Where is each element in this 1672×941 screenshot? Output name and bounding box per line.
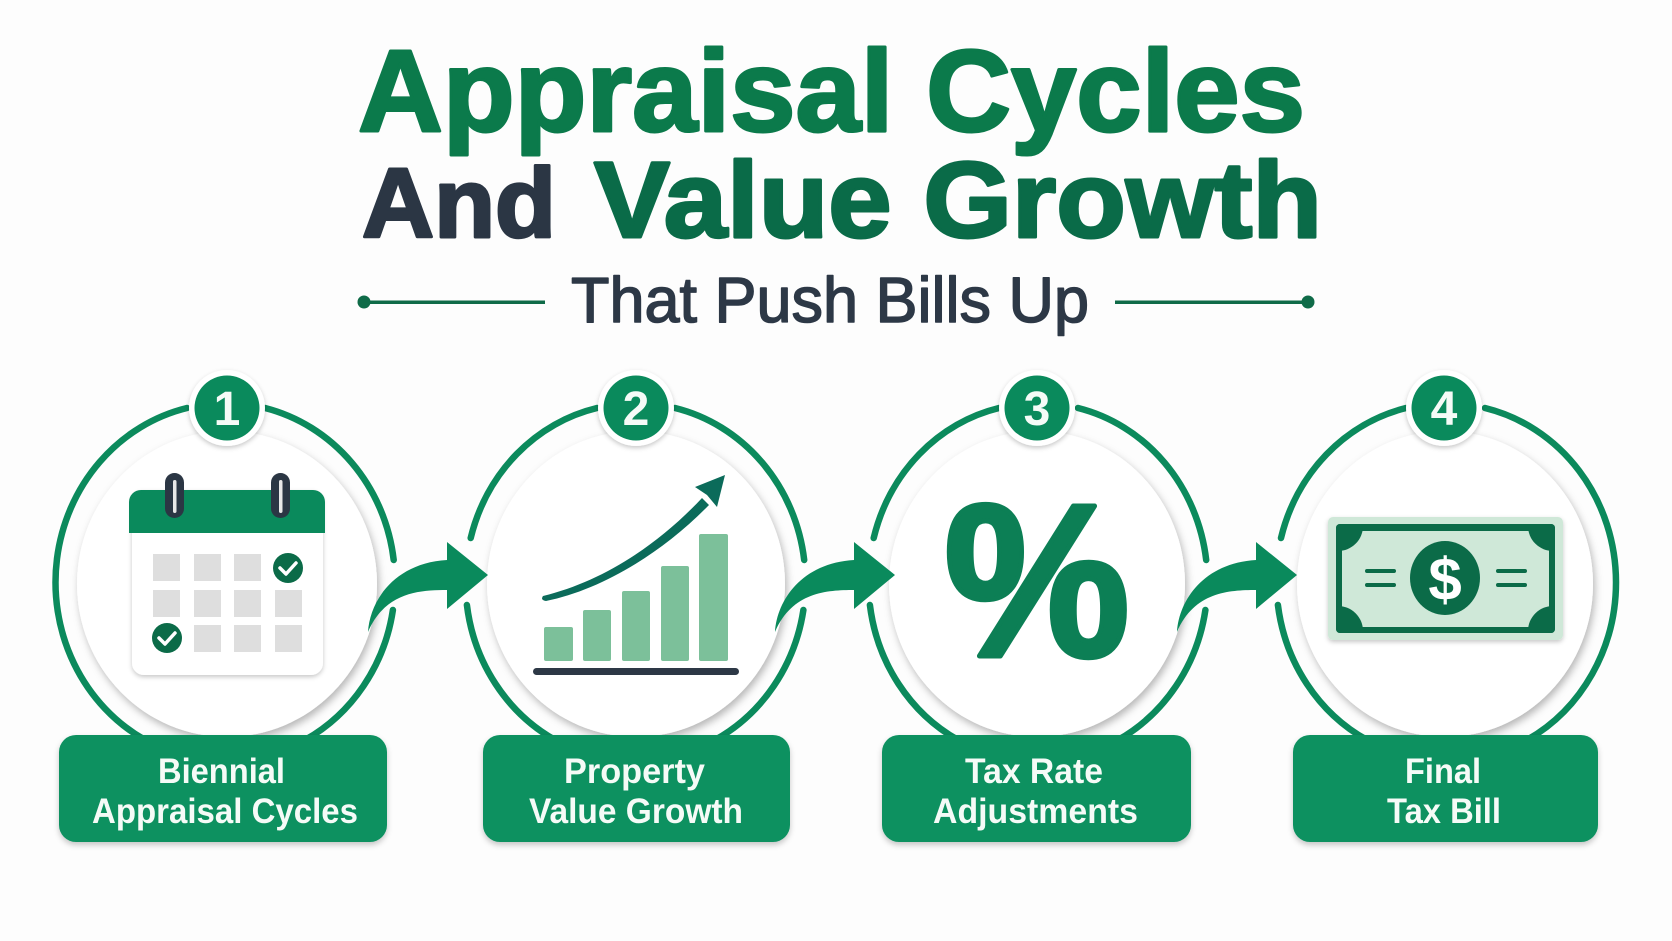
ring 3 bbox=[870, 408, 1206, 740]
icon: percent sign: % bbox=[944, 460, 1130, 703]
number badge 4 bbox=[1406, 370, 1482, 446]
label pill 4: Tax Bill bbox=[1387, 792, 1501, 831]
ring 1 bbox=[56, 408, 394, 740]
icon: growth bar chart bbox=[533, 475, 739, 675]
label pill 2: Value Growth bbox=[529, 792, 743, 831]
label pill 1 bbox=[59, 735, 387, 842]
label pill 1: Appraisal Cycles bbox=[92, 792, 358, 831]
title line 1: Appraisal Cycles bbox=[358, 26, 1305, 156]
subtitle text: That Push Bills Up bbox=[571, 264, 1089, 336]
arrow: step 3 to step 4 bbox=[1177, 542, 1297, 632]
panel: step 2 property value growth bbox=[467, 370, 804, 842]
number badge 1 bbox=[189, 370, 265, 446]
icon: calendar bbox=[129, 473, 325, 675]
label pill 4 bbox=[1293, 735, 1598, 842]
label pill 2: Property bbox=[564, 752, 706, 791]
subtitle with decorative rules bbox=[358, 264, 1314, 336]
inner circle 4 bbox=[1297, 431, 1593, 737]
icon: dollar bill bbox=[1326, 516, 1566, 644]
number badge 2 bbox=[598, 370, 674, 446]
panel: step 3 tax rate adjustments bbox=[870, 370, 1206, 842]
arrow: step 2 to step 3 bbox=[775, 542, 895, 632]
icon: dollar bill: $ bbox=[1428, 546, 1462, 613]
label pill 3: Adjustments bbox=[933, 792, 1138, 831]
inner circle 1 bbox=[77, 431, 377, 737]
label pill 3 bbox=[882, 735, 1191, 842]
label pill 4: Final bbox=[1405, 752, 1481, 791]
number badge 3: 3 bbox=[1024, 383, 1050, 436]
number badge 1: 1 bbox=[214, 383, 240, 436]
ring 2 bbox=[467, 408, 804, 740]
panel: step 4 final tax bill bbox=[1278, 370, 1616, 842]
number badge 4: 4 bbox=[1431, 383, 1458, 436]
arrow: step 1 to step 2 bbox=[368, 542, 488, 632]
label pill 3: Tax Rate bbox=[965, 752, 1103, 791]
title line 2: Value Growth: Value Growth bbox=[594, 139, 1322, 260]
label pill 1: Biennial bbox=[158, 752, 285, 791]
inner circle 2 bbox=[487, 431, 785, 737]
panel: step 1 biennial appraisal cycles bbox=[56, 370, 394, 842]
title line 2: And: And bbox=[362, 148, 556, 258]
ring 4 bbox=[1278, 408, 1616, 740]
label pill 2 bbox=[483, 735, 790, 842]
number badge 3 bbox=[999, 370, 1075, 446]
number badge 2: 2 bbox=[623, 383, 649, 436]
inner circle 3 bbox=[889, 431, 1185, 737]
title bbox=[358, 26, 1322, 260]
